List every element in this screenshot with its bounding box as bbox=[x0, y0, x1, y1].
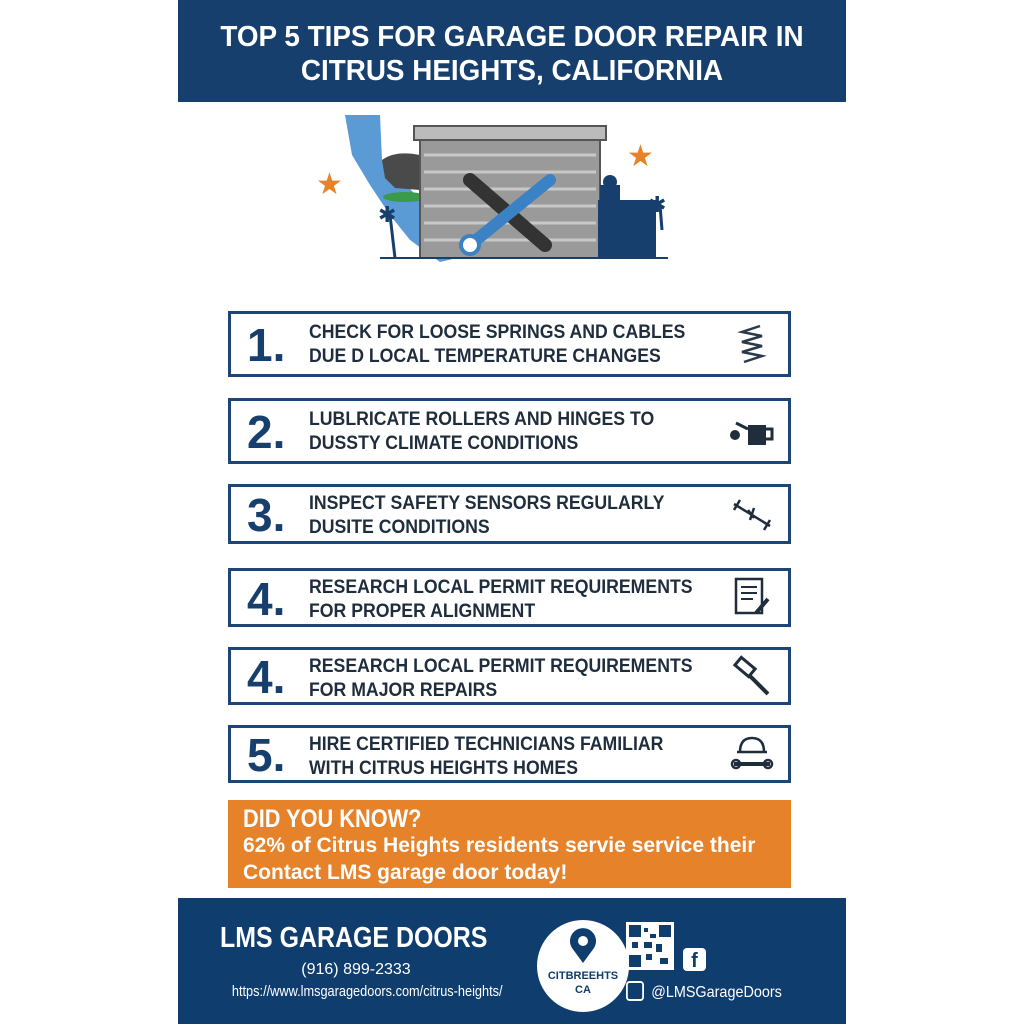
title: TOP 5 TIPS FOR GARAGE DOOR REPAIR IN bbox=[220, 21, 804, 53]
tip 2: 2. bbox=[247, 406, 285, 458]
phone and url: (916) 899-2333 bbox=[301, 961, 411, 978]
tip 5: 5. bbox=[247, 729, 285, 781]
icon: wrench bbox=[470, 180, 545, 245]
company name: LMS GARAGE DOORS bbox=[220, 922, 487, 954]
icon: facebook: f bbox=[691, 950, 698, 972]
icon: building and palms bbox=[598, 200, 656, 258]
icon: facebook bbox=[683, 948, 706, 971]
title: CITRUS HEIGHTS, CALIFORNIA bbox=[301, 55, 723, 87]
location badge: CITBREEHTS bbox=[548, 970, 618, 982]
tip 4 bbox=[228, 568, 791, 627]
tip 1: 1. bbox=[247, 319, 285, 371]
tip 4: RESEARCH LOCAL PERMIT REQUIREMENTS bbox=[309, 577, 693, 598]
tip 3 bbox=[228, 484, 791, 544]
illustration: garage with California: ✱ bbox=[648, 192, 666, 217]
callout: did you know: 62% of Citrus Heights residents servie service their bbox=[243, 834, 755, 857]
illustration: garage with California: ★ bbox=[627, 140, 654, 173]
tip 5: WITH CITRUS HEIGHTS HOMES bbox=[309, 758, 578, 779]
tip 1: DUE D LOCAL TEMPERATURE CHANGES bbox=[309, 346, 661, 367]
tip 1 bbox=[228, 311, 791, 377]
tip 4: 4. bbox=[247, 573, 285, 625]
tip 2: LUBLRICATE ROLLERS AND HINGES TO bbox=[309, 409, 654, 430]
tip 1: CHECK FOR LOOSE SPRINGS AND CABLES bbox=[309, 322, 685, 343]
illustration: garage with California: ✱ bbox=[378, 202, 396, 227]
tip 2 bbox=[228, 398, 791, 464]
tip 5: HIRE CERTIFIED TECHNICIANS FAMILIAR bbox=[309, 734, 663, 755]
icon: bear bbox=[382, 153, 430, 190]
phone and url bbox=[232, 961, 503, 1000]
callout: did you know: Contact LMS garage door today! bbox=[243, 861, 567, 884]
tip 3: 3. bbox=[247, 489, 285, 541]
callout: did you know: DID YOU KNOW? bbox=[243, 805, 421, 833]
tip 3: INSPECT SAFETY SENSORS REGULARLY bbox=[309, 493, 664, 514]
tip 2: DUSSTY CLIMATE CONDITIONS bbox=[309, 433, 578, 454]
tip 4b bbox=[228, 647, 791, 705]
tip 5 bbox=[228, 725, 791, 783]
illustration: garage with California bbox=[316, 115, 668, 262]
tip 4b: FOR MAJOR REPAIRS bbox=[309, 680, 497, 701]
callout: did you know bbox=[228, 800, 791, 888]
tip 4b: RESEARCH LOCAL PERMIT REQUIREMENTS bbox=[309, 656, 693, 677]
location badge bbox=[537, 920, 629, 1012]
title bbox=[178, 0, 846, 102]
tip 3: DUSITE CONDITIONS bbox=[309, 517, 490, 538]
tip 4b: 4. bbox=[247, 651, 285, 703]
icon: california map bbox=[345, 115, 470, 262]
icon: stars: ★ bbox=[316, 168, 343, 201]
tip 4: FOR PROPER ALIGNMENT bbox=[309, 601, 535, 622]
QR code bbox=[626, 922, 674, 970]
instagram handle: @LMSGarageDoors bbox=[651, 984, 782, 1001]
phone and url: https://www.lmsgaragedoors.com/citrus-heights/ bbox=[232, 983, 503, 1000]
location badge: CA bbox=[575, 984, 591, 996]
footer bbox=[178, 898, 846, 1024]
icon: garage bbox=[414, 126, 606, 140]
